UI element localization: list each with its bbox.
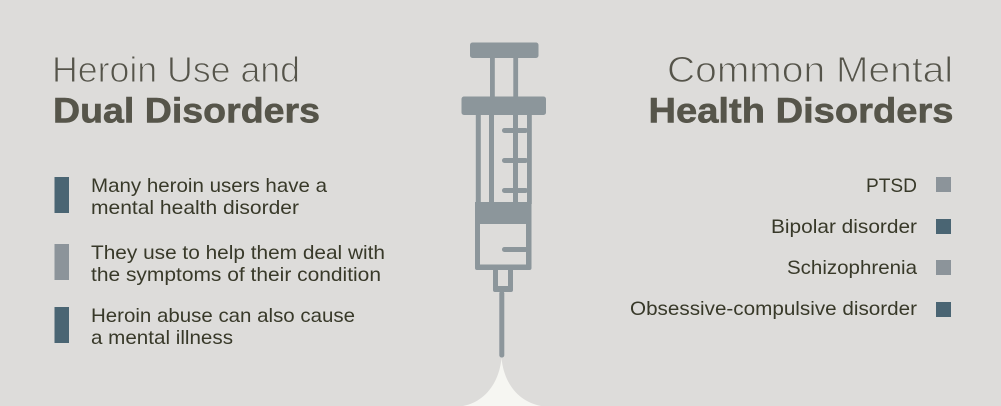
left title [52, 49, 320, 130]
item: abuse can cause illness [54, 305, 355, 349]
barrel upper lines [476, 114, 532, 204]
lower barrel [475, 222, 532, 270]
plunger rods [490, 57, 518, 98]
right title: Common Mental [667, 49, 953, 90]
item: many heroin users: mental health disorder [91, 197, 300, 219]
right title: Health Disorders [648, 92, 954, 130]
right title [648, 49, 954, 130]
item: abuse can cause illness: a mental illness [91, 327, 233, 349]
left list [54, 175, 385, 349]
needle [499, 291, 504, 358]
right list [630, 175, 951, 320]
icon: syringe [462, 42, 546, 358]
measurement ticks [502, 128, 528, 252]
plunger band [475, 202, 532, 224]
plunger top plate [470, 42, 538, 58]
item: PTSD [866, 175, 951, 197]
item: obsessive-compulsive disorder: Obsessive-compulsive disorder [630, 298, 918, 320]
item: use to deal with symptoms [54, 242, 385, 286]
item: PTSD: PTSD [866, 175, 917, 197]
barrel flange [462, 96, 546, 115]
left title: Heroin Use and [52, 49, 300, 90]
item: abuse can cause illness: Heroin abuse can also cause [91, 305, 355, 327]
item: bipolar disorder: Bipolar disorder [771, 216, 918, 238]
item: use to deal with symptoms: They use to help them deal with [91, 242, 385, 264]
nozzle [493, 269, 513, 292]
left title: Dual Disorders [53, 92, 320, 130]
item: many heroin users [54, 175, 327, 219]
drop at needle tip [463, 358, 541, 406]
item: use to deal with symptoms: the symptoms of their condition [91, 264, 381, 286]
item: many heroin users: Many heroin users have a [91, 175, 327, 197]
item: schizophrenia: Schizophrenia [787, 257, 917, 279]
